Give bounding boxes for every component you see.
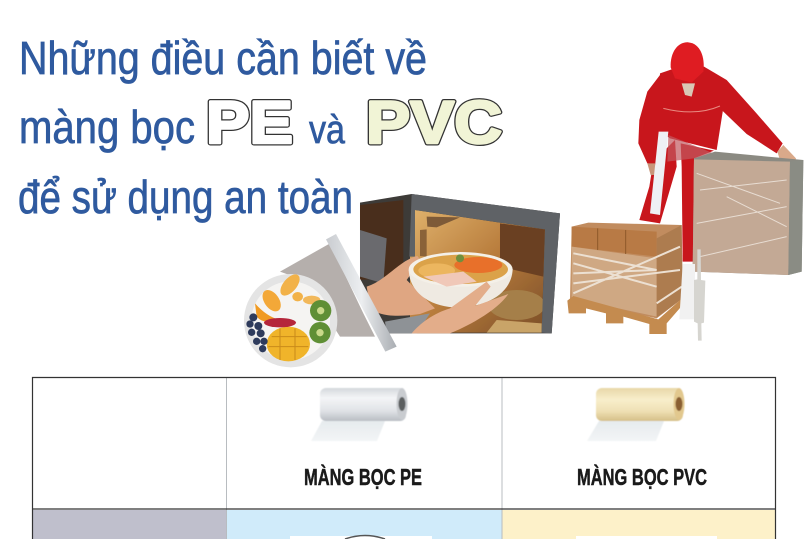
photo: microwave with bowl <box>360 194 560 333</box>
header cell: PVC column <box>577 388 707 490</box>
image top: PE <box>290 536 432 539</box>
row: blue PE cell <box>227 510 502 539</box>
photo: worker wrapping boxes <box>567 42 803 341</box>
outlined label PE: PE <box>206 89 293 156</box>
title <box>18 32 502 223</box>
helmet <box>671 42 704 83</box>
worker body <box>638 67 783 262</box>
right leg <box>681 143 714 262</box>
right arm <box>704 67 783 153</box>
label: MÀNG BỌC PVC: MÀNG BỌC PVC <box>577 463 707 490</box>
oven interior <box>410 210 545 333</box>
fruit <box>255 303 280 322</box>
label: MÀNG BỌC PE: MÀNG BỌC PE <box>304 463 422 490</box>
small white film sheet <box>679 264 695 319</box>
film strip <box>667 135 715 162</box>
title line 2: màng bọc: màng bọc <box>19 101 195 153</box>
plate <box>244 274 337 367</box>
blueberries <box>246 313 268 352</box>
microwave body <box>360 194 560 333</box>
icon: PE film roll <box>311 388 408 441</box>
outlined label PE: PE <box>206 89 293 156</box>
comparison table <box>32 378 776 539</box>
photo: fruit plate with film roll <box>244 234 397 367</box>
torso <box>658 67 727 150</box>
large wrapped box <box>693 152 803 275</box>
outlined label PVC: PVC <box>366 89 502 156</box>
left leg <box>639 140 677 223</box>
hands <box>777 145 796 168</box>
image top: PVC <box>576 536 717 539</box>
standing film roll <box>694 249 705 341</box>
title word: và: và <box>309 108 346 152</box>
neck <box>682 83 695 97</box>
title line 1: Những điều cần biết về <box>19 32 427 84</box>
front hand <box>412 282 508 333</box>
dish bowl <box>409 269 513 307</box>
header cell: PE column <box>304 388 422 490</box>
title line 3: để sử dụng an toàn <box>18 171 353 223</box>
wrap film <box>280 243 375 337</box>
row: grey label cell <box>33 510 226 539</box>
outlined label PVC: PVC <box>366 89 502 156</box>
row: yellow PVC cell <box>502 510 775 539</box>
hand roll <box>650 132 668 215</box>
pallet of boxes <box>570 223 683 318</box>
icon: PVC film roll <box>587 388 684 441</box>
hands <box>367 256 435 316</box>
wooden pallet <box>567 296 684 334</box>
left arm <box>638 75 672 164</box>
roll bar <box>326 234 397 352</box>
